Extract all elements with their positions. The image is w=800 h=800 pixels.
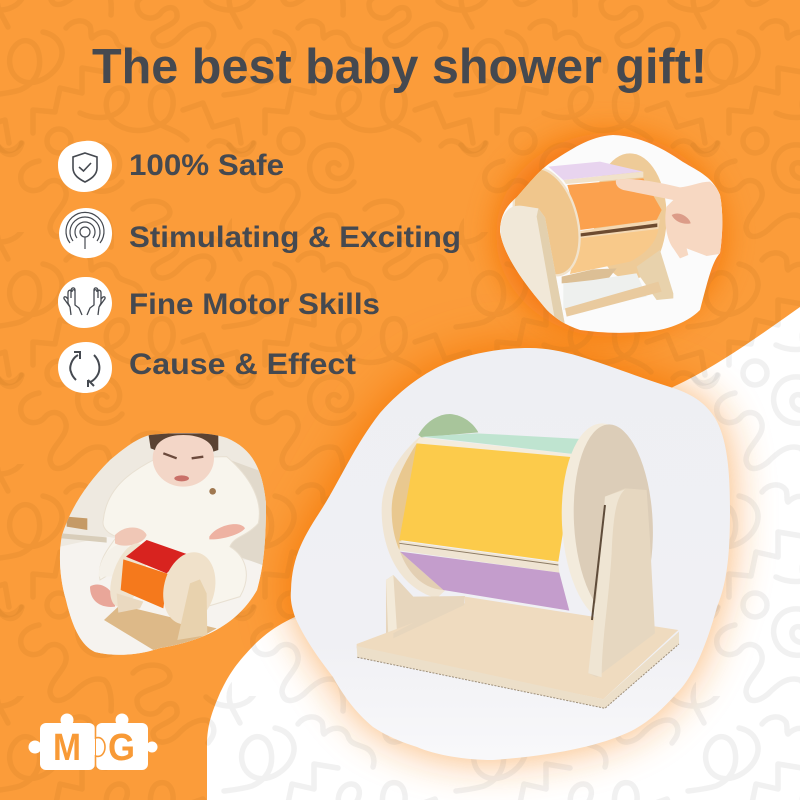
label: 100% Safe <box>129 149 284 182</box>
main photo: spinning drum toy <box>285 340 735 770</box>
drum left disc <box>382 435 445 598</box>
drum panels <box>422 433 588 455</box>
benefit: cause and effect <box>58 342 356 393</box>
benefit: fine motor skills <box>58 277 380 328</box>
right stand <box>588 488 655 677</box>
label: Stimulating & Exciting <box>129 221 461 254</box>
logo: MG puzzle pieces <box>28 714 158 770</box>
M piece <box>28 714 95 770</box>
icon: shield <box>58 141 112 192</box>
left stand <box>386 575 465 638</box>
icon: signal <box>59 208 112 258</box>
drum right disc <box>562 424 608 616</box>
label: Fine Motor Skills <box>129 288 380 321</box>
label: Cause & Effect <box>129 348 356 381</box>
logo: MG puzzle pieces: M <box>53 727 81 769</box>
base <box>357 597 678 699</box>
puzzle joint <box>96 723 105 770</box>
photo: baby playing with toy <box>55 430 270 660</box>
icon: cycle arrows <box>58 342 112 393</box>
G piece <box>96 714 158 770</box>
icon: hands <box>58 277 112 328</box>
logo: MG puzzle pieces: G <box>108 727 135 769</box>
benefit: stimulating <box>59 208 461 258</box>
photo: finger spinning the toy <box>500 135 722 333</box>
title: The best baby shower gift! <box>92 40 707 94</box>
white corner shape with peach glow and pale squiggles <box>207 307 800 800</box>
benefit: 100% safe <box>58 141 284 192</box>
